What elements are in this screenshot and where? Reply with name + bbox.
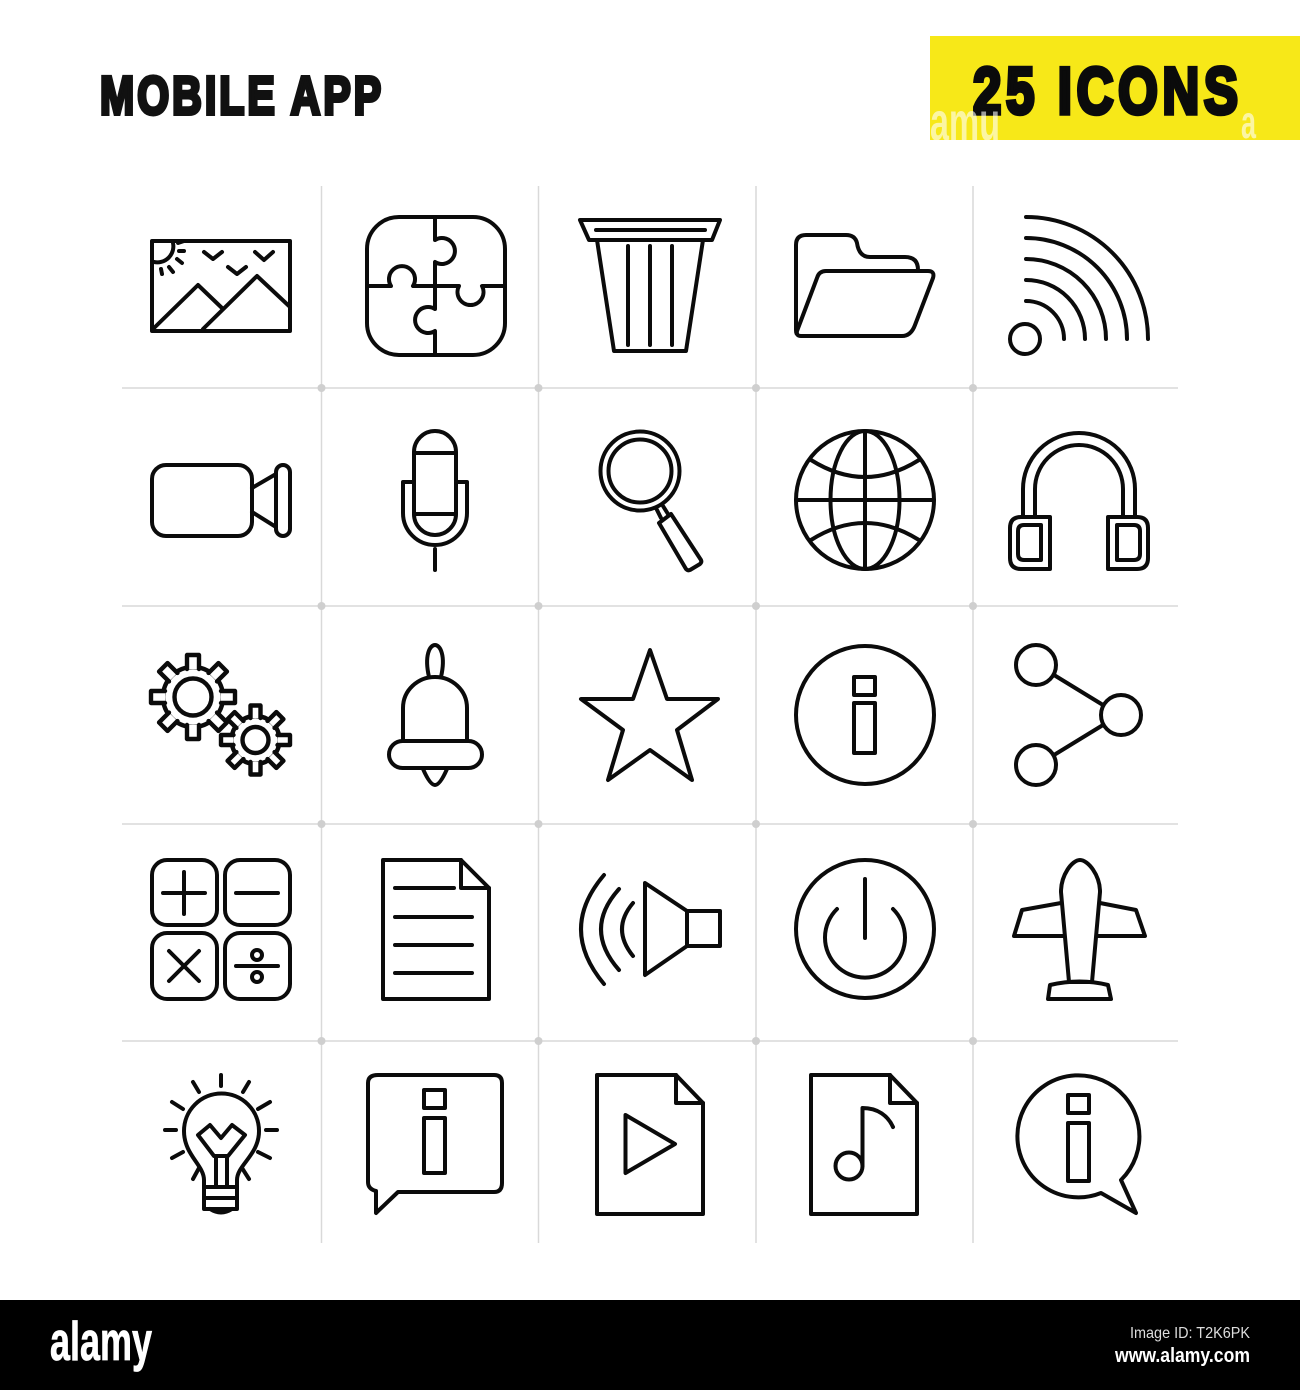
icon: light bulb: [165, 1075, 277, 1212]
icon: puzzle: [367, 217, 505, 355]
icon: landscape picture: [152, 241, 290, 331]
icon: info circle: [796, 646, 934, 784]
icon: globe: [796, 431, 934, 569]
website: www.alamy.com: [1114, 1345, 1250, 1367]
footer bar: [0, 1300, 1300, 1390]
icon: gears: [151, 655, 290, 774]
icon: airplane: [1014, 860, 1145, 999]
icon: music file: [811, 1075, 917, 1214]
icon: magnifier: [600, 432, 701, 570]
badge: 25 icons: amu: [930, 92, 1000, 152]
title: MOBILE APP: [100, 67, 384, 126]
icon: video camera: [152, 465, 290, 536]
icon: info speech bubble: [1017, 1075, 1139, 1213]
icon: headphones: [1010, 433, 1148, 569]
icon: folder: [796, 235, 933, 336]
icon: star: [581, 650, 718, 780]
badge: 25 icons: a: [1241, 96, 1256, 148]
icon: trash bin: [580, 220, 720, 351]
icon: speaker: [581, 875, 720, 984]
icon: power button: [796, 860, 934, 998]
icon: calculator: [152, 860, 290, 999]
icon: bell: [389, 645, 482, 785]
footer logo: alamy: [50, 1310, 152, 1372]
image id: Image ID: T2K6PK: [1130, 1325, 1250, 1342]
badge: 25 icons: [930, 36, 1300, 140]
icon: document: [383, 860, 489, 999]
icon: wifi signal: [1010, 217, 1148, 354]
icon: share: [1016, 645, 1141, 785]
icon: info speech box: [368, 1075, 502, 1213]
icon: microphone: [403, 431, 467, 570]
badge: 25 icons: 25 ICONS: [973, 56, 1243, 128]
icon: video file: [597, 1075, 703, 1214]
